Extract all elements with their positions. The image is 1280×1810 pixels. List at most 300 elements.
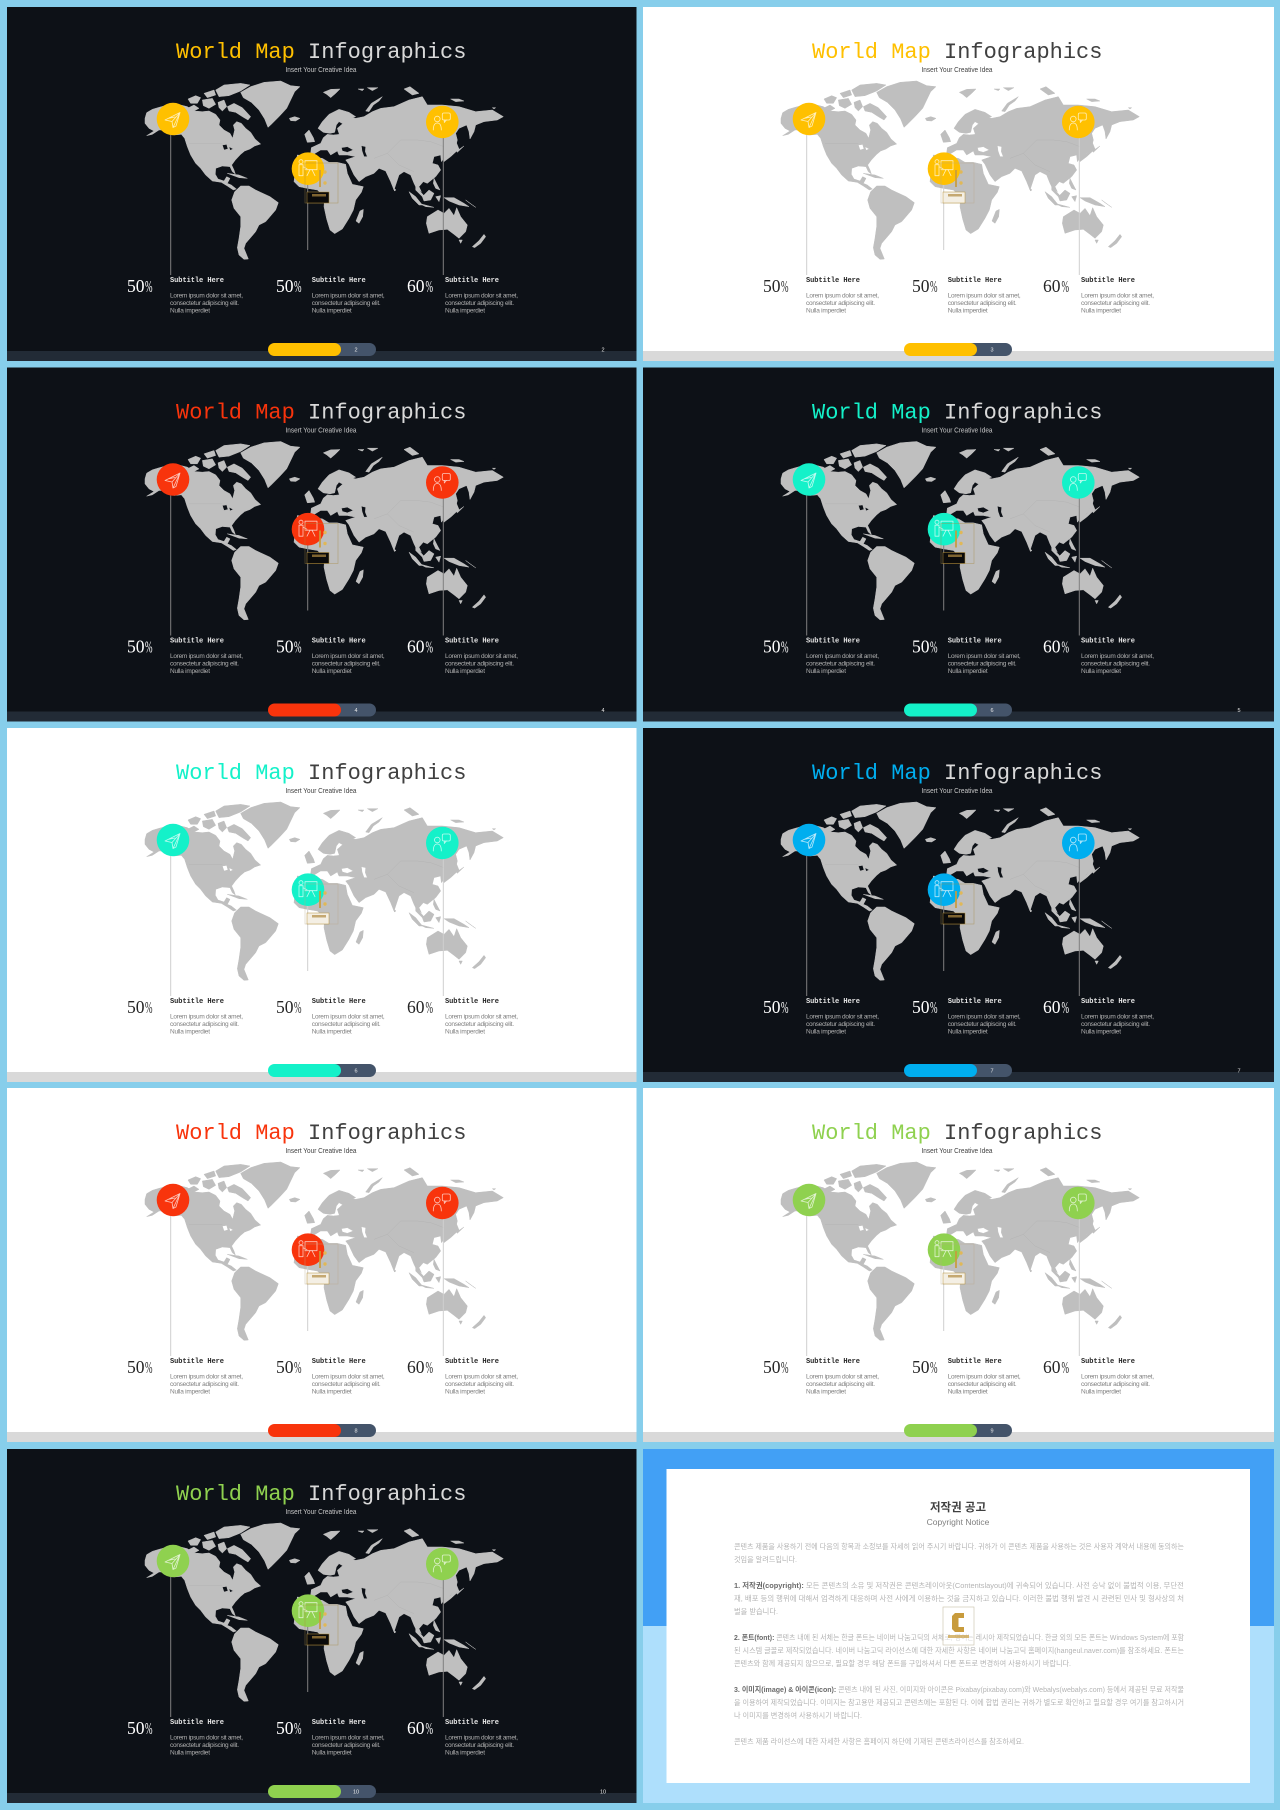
notice intro (734, 1541, 1184, 1564)
icon: people marker (1062, 466, 1095, 499)
stat 3 (407, 1718, 518, 1757)
stat 1: consectetur adipiscing elit. (806, 1021, 875, 1028)
stat 3 (1043, 1357, 1154, 1396)
progress pill: 3 (990, 348, 994, 354)
icon: presentation marker (292, 1233, 324, 1266)
progress pill (904, 704, 1012, 716)
subtitle: Insert Your Creative Idea (286, 67, 357, 74)
stat 2: % (294, 638, 302, 656)
watermark (305, 524, 338, 564)
stat 2: % (930, 1358, 938, 1377)
pointer line 3 (442, 138, 444, 275)
stat 3: 60 (1043, 276, 1061, 296)
stat 3: Subtitle Here (1081, 277, 1135, 285)
pointer line 2 (943, 542, 945, 610)
stat 2: consectetur adipiscing elit. (948, 660, 1017, 668)
panel: dark red slide (7, 368, 636, 722)
icon: people marker (1062, 1187, 1095, 1219)
stat 1 (763, 997, 879, 1036)
stat 2: Lorem ipsum dolor sit amet, (312, 292, 385, 300)
title: World Map Infographics (176, 40, 466, 65)
stat 3: % (1062, 1358, 1069, 1377)
stat 2: Nulla imperdiet (312, 308, 352, 315)
pointer line 3 (442, 1219, 444, 1356)
stat 1: 50 (127, 636, 145, 656)
stat 2: 50 (276, 997, 294, 1017)
panel: white teal slide (7, 728, 636, 1082)
pointer line 1 (170, 496, 172, 636)
stat 3: Lorem ipsum dolor sit amet, (1081, 1374, 1154, 1380)
title: World Map Infographics (812, 761, 1102, 786)
icon: presentation marker (292, 873, 324, 906)
subtitle: Insert Your Creative Idea (922, 788, 993, 795)
progress pill: 8 (354, 1428, 358, 1434)
stat 1: consectetur adipiscing elit. (806, 300, 875, 307)
stat 1: Subtitle Here (170, 998, 224, 1006)
notice section 2: 된 시스템 글꼴로 제작되었습니다. 네이버 나눔고딕 라이선스에 대한 자세한 사항은 네이버 나눔고딕 홈페이지(hangeul.naver.com)를 참조하세요. 폰트는 (734, 1645, 1184, 1655)
stat 2 (276, 276, 385, 315)
stat 3 (1043, 276, 1154, 315)
pointer line 3 (1078, 138, 1080, 275)
icon: presentation marker (292, 513, 324, 546)
progress pill: 10 (353, 1790, 359, 1796)
stat 1: 50 (763, 997, 781, 1017)
stat 2 (912, 276, 1021, 315)
stat 1: 50 (127, 276, 145, 296)
stat 3: 60 (1043, 1357, 1061, 1377)
panel: dark green slide (7, 1449, 636, 1803)
title: World Map Infographics (812, 1121, 1102, 1146)
pointer line 2 (307, 903, 309, 971)
stat 2: consectetur adipiscing elit. (948, 1021, 1017, 1028)
page number: 7 (1237, 1068, 1241, 1074)
icon: people marker (426, 466, 459, 499)
world map (145, 1162, 503, 1340)
stat 1 (127, 636, 243, 675)
subtitle: Insert Your Creative Idea (922, 428, 993, 434)
panel: white green slide (643, 1088, 1274, 1442)
notice card (666, 1469, 1250, 1783)
title: World Map Infographics (176, 1482, 466, 1507)
stat 1: 50 (127, 1718, 145, 1738)
stat 2: Subtitle Here (312, 1358, 366, 1366)
notice section 3: 3. 이미지(image) & 아이콘(icon): 콘텐츠 내에 된 사진, 이미지와 아이콘은 Pixabay(pixabay.com)와 Webalys(webalys.com) 등에서 제공된 무료 저작물 (734, 1684, 1184, 1694)
stat 2: Nulla imperdiet (312, 1029, 352, 1036)
stat 3: Subtitle Here (445, 638, 499, 646)
stat 1: Nulla imperdiet (170, 1029, 210, 1036)
stat 1: Lorem ipsum dolor sit amet, (170, 292, 243, 300)
stat 3: consectetur adipiscing elit. (445, 660, 514, 668)
stat 1: % (145, 998, 152, 1017)
stat 3: Nulla imperdiet (1081, 668, 1121, 675)
stat 2: Subtitle Here (948, 277, 1002, 285)
stat 2 (276, 1718, 385, 1757)
progress pill: 7 (990, 1068, 994, 1074)
stat 1: 50 (763, 276, 781, 296)
notice section 3 (734, 1684, 1184, 1720)
stat 2: % (294, 277, 302, 296)
stat 3: Lorem ipsum dolor sit amet, (1081, 1014, 1154, 1020)
stat 1: % (145, 1358, 152, 1377)
world map (145, 802, 503, 980)
stat 3 (407, 997, 518, 1036)
notice section 1: 1. 저작권(copyright): 모든 콘텐츠의 소유 및 저작권은 콘텐츠레이아웃(Contentslayout)에 귀속되어 있습니다. 사전 승낙 없이 불법적 이용, 무단전 (734, 1580, 1184, 1590)
progress pill: 6 (990, 708, 994, 714)
stat 2: 50 (912, 636, 930, 656)
stat 1: consectetur adipiscing elit. (170, 1381, 239, 1388)
stat 3: consectetur adipiscing elit. (445, 1742, 514, 1749)
stat 3: % (426, 1719, 433, 1738)
stat 1: % (781, 638, 788, 656)
icon: presentation marker (292, 1594, 324, 1627)
pointer line 1 (806, 1216, 808, 1356)
stat 2 (276, 636, 385, 675)
stat 1: Subtitle Here (806, 998, 860, 1006)
stat 3: Nulla imperdiet (445, 668, 485, 675)
stat 2: Subtitle Here (312, 998, 366, 1006)
stat 3: Lorem ipsum dolor sit amet, (1081, 653, 1154, 660)
panel: dark blue slide (643, 728, 1274, 1082)
world map (145, 441, 503, 620)
stat 1: Nulla imperdiet (806, 668, 846, 675)
world map (145, 1523, 503, 1701)
pointer line 2 (943, 903, 945, 971)
pointer line 2 (307, 182, 309, 250)
pointer line 3 (442, 859, 444, 996)
stat 3: Lorem ipsum dolor sit amet, (445, 1374, 518, 1380)
stat 2: % (930, 638, 938, 656)
pointer line 2 (943, 182, 945, 250)
world map (781, 81, 1139, 259)
icon: people marker (426, 1548, 459, 1580)
stat 3: Nulla imperdiet (1081, 1029, 1121, 1036)
title: World Map Infographics (812, 400, 1102, 426)
stat 2: consectetur adipiscing elit. (312, 300, 381, 307)
stat 1 (127, 276, 243, 315)
page number: 10 (600, 1790, 606, 1796)
stat 3: 60 (407, 1357, 425, 1377)
stat 3: consectetur adipiscing elit. (445, 1021, 514, 1028)
notice intro: 콘텐츠 제품을 사용하기 전에 다음의 항목과 소정보를 자세히 읽어 주시기 바랍니다. 귀하가 이 콘텐츠 제품을 사용하는 것은 사용자 계약서 내용에 동의하는 (734, 1541, 1184, 1551)
stat 2: Nulla imperdiet (312, 1389, 352, 1396)
stat 3: 60 (407, 636, 425, 656)
stat 2: % (930, 998, 938, 1017)
stat 2: Nulla imperdiet (312, 668, 352, 675)
stat 1: 50 (127, 1357, 145, 1377)
stat 1: Lorem ipsum dolor sit amet, (806, 653, 879, 660)
stat 2: % (294, 998, 302, 1017)
pointer line 3 (442, 498, 444, 636)
stat 2: Subtitle Here (312, 277, 366, 285)
stat 3: Nulla imperdiet (445, 1029, 485, 1036)
stat 1 (763, 276, 879, 315)
subtitle: Insert Your Creative Idea (286, 1509, 357, 1516)
stat 2: 50 (912, 1357, 930, 1377)
stat 2: Lorem ipsum dolor sit amet, (312, 1374, 385, 1380)
icon: paper plane marker (793, 463, 825, 496)
panel: white yellow slide (643, 7, 1274, 361)
progress pill (268, 704, 376, 716)
stat 3: Subtitle Here (445, 1719, 499, 1727)
subtitle: Insert Your Creative Idea (286, 428, 357, 434)
pointer line 2 (307, 1624, 309, 1692)
progress pill (268, 1064, 376, 1077)
stat 3: consectetur adipiscing elit. (445, 300, 514, 307)
stat 1: % (145, 277, 152, 296)
pointer line 2 (943, 1263, 945, 1331)
progress pill (268, 1785, 376, 1798)
stat 2: Lorem ipsum dolor sit amet, (948, 1374, 1021, 1380)
icon: people marker (1062, 827, 1095, 859)
progress pill (904, 343, 1012, 356)
stat 2: 50 (912, 997, 930, 1017)
world map (781, 441, 1139, 620)
stat 1: Subtitle Here (170, 1358, 224, 1366)
stat 2: Lorem ipsum dolor sit amet, (948, 1014, 1021, 1020)
progress pill: 2 (354, 348, 358, 354)
stat 2: Lorem ipsum dolor sit amet, (948, 653, 1021, 660)
pointer line 1 (806, 135, 808, 275)
stat 2: % (294, 1719, 302, 1738)
stat 1: Nulla imperdiet (806, 1029, 846, 1036)
page number: 2 (601, 348, 605, 354)
progress pill (268, 1424, 376, 1437)
stat 3: Subtitle Here (1081, 1358, 1135, 1366)
stat 3: 60 (407, 1718, 425, 1738)
icon: people marker (426, 827, 459, 859)
watermark (305, 163, 338, 203)
stat 3: Lorem ipsum dolor sit amet, (445, 292, 518, 300)
stat 1 (127, 997, 243, 1036)
progress pill (268, 343, 376, 356)
pointer line 1 (170, 856, 172, 996)
stat 1: % (145, 1719, 152, 1738)
stat 1: 50 (127, 997, 145, 1017)
stat 1 (127, 1357, 243, 1396)
pointer line 1 (170, 1577, 172, 1717)
stat 1: Lorem ipsum dolor sit amet, (806, 1014, 879, 1020)
pointer line 3 (442, 1580, 444, 1717)
stat 1: 50 (763, 636, 781, 656)
stat 2: Subtitle Here (948, 638, 1002, 646)
world map (781, 802, 1139, 980)
stat 1: consectetur adipiscing elit. (170, 300, 239, 307)
stat 2: Lorem ipsum dolor sit amet, (312, 1014, 385, 1020)
notice subheading: Copyright Notice (927, 1517, 990, 1527)
stat 3 (407, 276, 518, 315)
icon: paper plane marker (157, 1545, 189, 1577)
icon: presentation marker (928, 873, 960, 906)
subtitle: Insert Your Creative Idea (286, 788, 357, 795)
stat 3: consectetur adipiscing elit. (1081, 1021, 1150, 1028)
stat 1: Subtitle Here (170, 277, 224, 285)
icon: paper plane marker (793, 1184, 825, 1216)
title: World Map Infographics (812, 40, 1102, 65)
stat 1: % (781, 998, 788, 1017)
notice section 1: 재, 배포 등의 행위에 대해서 엄격하게 대응하며 사전 사에게 이용하는 것을 금지하고 있습니다. 이러한 불법 행위 발견 시 관련된 민사 및 형사상의 처 (734, 1593, 1184, 1603)
panel: dark teal slide (643, 368, 1274, 722)
notice section 3: 나 이미지를 변경하여 사용하시기 바랍니다. (734, 1710, 862, 1720)
stat 1: Subtitle Here (806, 277, 860, 285)
progress pill: 9 (990, 1428, 994, 1434)
icon: presentation marker (928, 152, 960, 185)
stat 2: Nulla imperdiet (948, 1029, 988, 1036)
stat 1: Nulla imperdiet (170, 308, 210, 315)
world map (145, 81, 503, 259)
stat 2: consectetur adipiscing elit. (312, 660, 381, 668)
icon: paper plane marker (157, 1184, 189, 1216)
icon: presentation marker (928, 1233, 960, 1266)
stat 1: Subtitle Here (170, 638, 224, 646)
stat 2: % (930, 277, 938, 296)
stat 3: % (426, 277, 433, 296)
stat 3: % (1062, 998, 1069, 1017)
stat 1: Lorem ipsum dolor sit amet, (170, 653, 243, 660)
notice section 2: 콘텐츠와 함께 제공되지 않으므로, 필요할 경우 해당 폰트를 구입하셔서 다른 폰트로 변경하여 사용하시기 바랍니다. (734, 1658, 1071, 1668)
notice section 2: 2. 폰트(font): 콘텐츠 내에 된 서체는 한글 폰트는 네이버 나눔고딕의 서체로, 영어는 레시아 제작되었습니다. 한글 외의 모든 폰트는 Windows System에 포함 (734, 1632, 1184, 1642)
stat 1: % (145, 638, 152, 656)
notice heading: 저작권 공고 (930, 1500, 986, 1514)
stat 3 (1043, 636, 1154, 675)
stat 2: Nulla imperdiet (948, 1389, 988, 1396)
title: World Map Infographics (176, 400, 466, 426)
stat 3: % (426, 638, 433, 656)
icon: people marker (426, 1187, 459, 1219)
subtitle: Insert Your Creative Idea (922, 1148, 993, 1155)
stat 3: Nulla imperdiet (445, 1750, 485, 1757)
stat 2: Subtitle Here (948, 998, 1002, 1006)
stat 1: Subtitle Here (806, 638, 860, 646)
stat 1: % (781, 277, 788, 296)
stat 2: Lorem ipsum dolor sit amet, (312, 1734, 385, 1742)
stat 3 (1043, 997, 1154, 1036)
stat 2: 50 (276, 276, 294, 296)
stat 1: Lorem ipsum dolor sit amet, (806, 1374, 879, 1380)
stat 2: 50 (912, 276, 930, 296)
stat 2: consectetur adipiscing elit. (312, 1742, 381, 1749)
title: World Map Infographics (176, 1121, 466, 1146)
stat 3 (407, 636, 518, 675)
icon: presentation marker (928, 513, 960, 546)
stat 3: Subtitle Here (1081, 998, 1135, 1006)
stat 1 (763, 1357, 879, 1396)
stat 2: Subtitle Here (312, 638, 366, 646)
stat 2: Lorem ipsum dolor sit amet, (948, 292, 1021, 300)
stat 3: consectetur adipiscing elit. (1081, 1381, 1150, 1388)
stat 2 (912, 1357, 1021, 1396)
stat 1: Nulla imperdiet (806, 308, 846, 315)
stat 1: Nulla imperdiet (170, 1389, 210, 1396)
stat 3: Nulla imperdiet (1081, 1389, 1121, 1396)
stat 3: Lorem ipsum dolor sit amet, (445, 653, 518, 660)
stat 3: Nulla imperdiet (445, 1389, 485, 1396)
stat 1: Lorem ipsum dolor sit amet, (170, 1734, 243, 1742)
stat 3: Subtitle Here (445, 277, 499, 285)
progress pill: 4 (354, 708, 358, 714)
stat 3: 60 (1043, 997, 1061, 1017)
stat 1: Subtitle Here (806, 1358, 860, 1366)
stat 3: 60 (407, 997, 425, 1017)
stat 2: Lorem ipsum dolor sit amet, (312, 653, 385, 660)
stat 2: 50 (276, 636, 294, 656)
stat 1: Nulla imperdiet (170, 1750, 210, 1757)
progress pill (904, 1424, 1012, 1437)
pointer line 1 (806, 496, 808, 636)
watermark (305, 1605, 338, 1645)
pointer line 2 (307, 1263, 309, 1331)
subtitle: Insert Your Creative Idea (922, 67, 993, 74)
stat 3: consectetur adipiscing elit. (445, 1381, 514, 1388)
pointer line 1 (170, 135, 172, 275)
stat 2: consectetur adipiscing elit. (312, 1021, 381, 1028)
world map (781, 1162, 1139, 1340)
watermark (305, 1244, 338, 1284)
progress pill (904, 1064, 1012, 1077)
title: World Map Infographics (176, 761, 466, 786)
stat 3: Subtitle Here (1081, 638, 1135, 646)
notice section 2 (734, 1632, 1184, 1668)
watermark (941, 163, 974, 203)
page number: 4 (601, 708, 605, 714)
stat 2: Nulla imperdiet (312, 1750, 352, 1757)
notice intro: 것임을 알려드립니다. (734, 1554, 797, 1564)
stat 2: consectetur adipiscing elit. (948, 1381, 1017, 1388)
notice footer line: 콘텐츠 제품 라이선스에 대한 자세한 사항은 홈페이지 하단에 기재된 콘텐츠라이선스를 참조하세요. (734, 1736, 1024, 1746)
stat 3: Lorem ipsum dolor sit amet, (445, 1014, 518, 1020)
icon: people marker (426, 106, 459, 138)
stat 3: Nulla imperdiet (1081, 308, 1121, 315)
stat 3: 60 (1043, 636, 1061, 656)
stat 2 (912, 636, 1021, 675)
stat 3 (407, 1357, 518, 1396)
stat 3: % (426, 998, 433, 1017)
panel: dark yellow slide (7, 7, 636, 361)
stat 1: % (781, 1358, 788, 1377)
stat 2 (276, 997, 385, 1036)
panel: white red slide (7, 1088, 636, 1442)
stat 3: consectetur adipiscing elit. (1081, 300, 1150, 307)
watermark (305, 884, 338, 924)
stat 3: Lorem ipsum dolor sit amet, (445, 1734, 518, 1742)
watermark (941, 1244, 974, 1284)
stat 3: Subtitle Here (445, 998, 499, 1006)
stat 1: Lorem ipsum dolor sit amet, (170, 1374, 243, 1380)
watermark (943, 1607, 974, 1645)
stat 2: Nulla imperdiet (948, 308, 988, 315)
icon: paper plane marker (793, 824, 825, 856)
stat 2: 50 (276, 1718, 294, 1738)
stat 1 (127, 1718, 243, 1757)
stat 3: Nulla imperdiet (445, 308, 485, 315)
stat 1: consectetur adipiscing elit. (170, 1021, 239, 1028)
stat 2: consectetur adipiscing elit. (948, 300, 1017, 307)
stat 1: Lorem ipsum dolor sit amet, (806, 292, 879, 300)
page number: 5 (1237, 708, 1241, 714)
stat 2: Subtitle Here (948, 1358, 1002, 1366)
stat 2: consectetur adipiscing elit. (312, 1381, 381, 1388)
stat 3: Lorem ipsum dolor sit amet, (1081, 292, 1154, 300)
subtitle: Insert Your Creative Idea (286, 1148, 357, 1155)
stat 1: consectetur adipiscing elit. (806, 660, 875, 668)
stat 1 (763, 636, 879, 675)
stat 1: consectetur adipiscing elit. (806, 1381, 875, 1388)
stat 2: 50 (276, 1357, 294, 1377)
stat 3: 60 (407, 276, 425, 296)
stat 3: % (426, 1358, 433, 1377)
stat 3: consectetur adipiscing elit. (1081, 660, 1150, 668)
stat 3: Subtitle Here (445, 1358, 499, 1366)
watermark (941, 884, 974, 924)
